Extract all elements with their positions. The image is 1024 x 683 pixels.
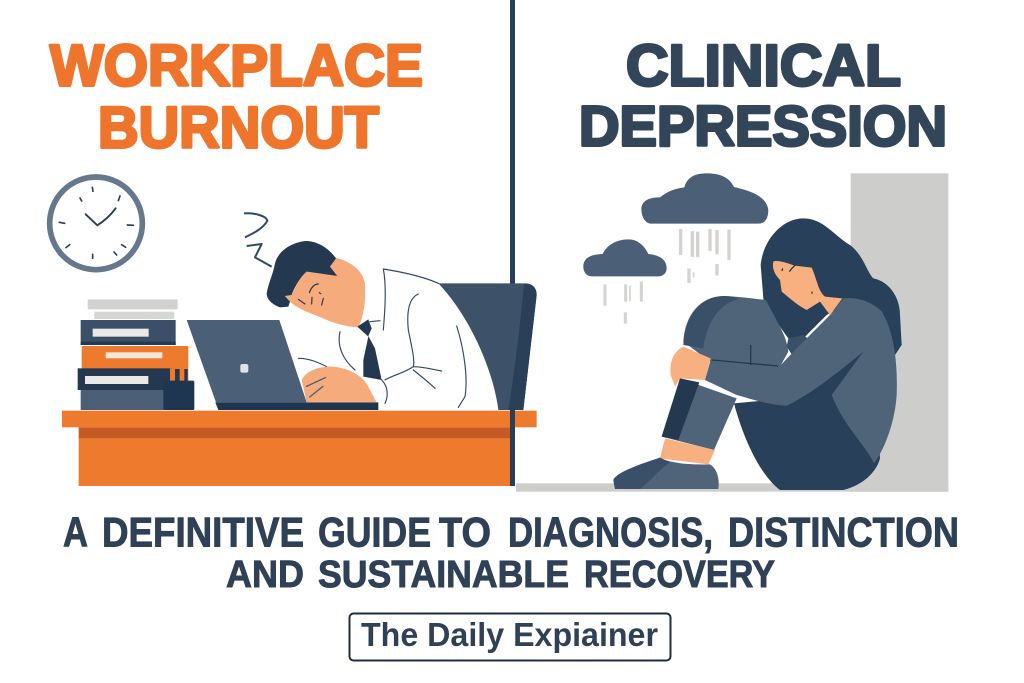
chair xyxy=(438,283,537,410)
face xyxy=(773,261,842,315)
subtitle: AND xyxy=(226,554,304,596)
upper leg xyxy=(683,296,788,367)
heading: clinical depression: DEPRESSION xyxy=(579,94,947,158)
subtitle xyxy=(63,508,959,596)
face xyxy=(285,257,365,327)
woman sitting xyxy=(613,218,902,490)
knee skin xyxy=(670,347,711,387)
badge: the daily explainer: The Daily Expiainer xyxy=(361,616,658,653)
laptop xyxy=(187,320,378,410)
heading: clinical depression: CLINICAL xyxy=(626,34,901,98)
tie xyxy=(357,319,382,380)
book stack xyxy=(78,299,194,410)
man slumped on desk xyxy=(267,241,466,407)
ankle xyxy=(660,438,715,464)
center divider xyxy=(510,0,515,486)
heading: clinical depression xyxy=(579,34,947,158)
subtitle: A xyxy=(63,508,88,556)
icon: fatigue squiggle xyxy=(244,213,272,267)
subtitle: TO xyxy=(439,508,491,556)
icon: wall clock xyxy=(50,177,142,270)
lower leg xyxy=(662,378,737,450)
wall and floor xyxy=(516,173,948,492)
hand xyxy=(302,367,377,402)
subtitle: GUIDE xyxy=(318,508,431,556)
subtitle: DISTINCTION xyxy=(728,508,959,556)
hair xyxy=(267,241,337,307)
subtitle: SUSTAINABLE xyxy=(318,554,569,596)
subtitle: DIAGNOSIS, xyxy=(508,508,713,556)
shirt outline xyxy=(298,269,466,407)
small rain cloud xyxy=(583,239,667,324)
heading: workplace burnout xyxy=(50,34,423,160)
heading: workplace burnout: BURNOUT xyxy=(98,96,379,160)
hair xyxy=(761,218,902,355)
subtitle: RECOVERY xyxy=(584,554,775,596)
shadow at lap xyxy=(787,335,810,354)
arm xyxy=(705,298,883,406)
illustration: burnout scene xyxy=(50,177,537,486)
torso xyxy=(734,352,880,490)
large rain cloud xyxy=(641,173,768,283)
subtitle: DEFINITIVE xyxy=(102,508,304,556)
heading: workplace burnout: WORKPLACE xyxy=(50,34,423,98)
desk xyxy=(62,410,537,486)
illustration: depression scene xyxy=(516,173,948,492)
shoe xyxy=(613,458,719,489)
